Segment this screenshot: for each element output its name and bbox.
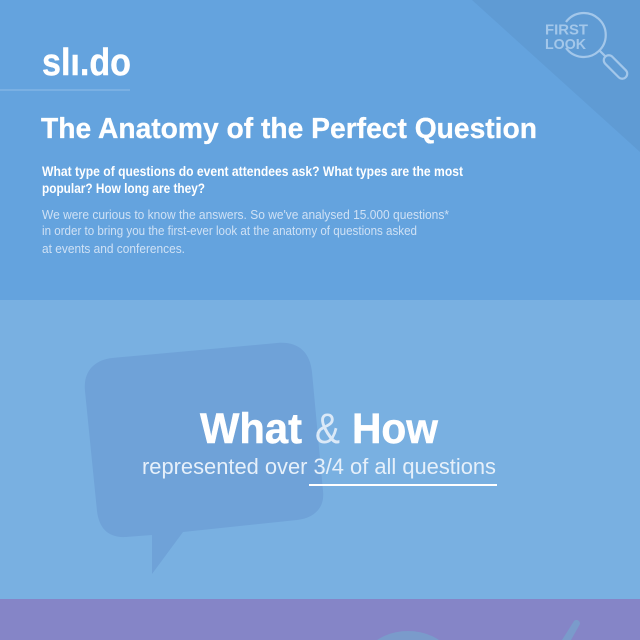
icon: first look magnifier badge: [545, 13, 629, 81]
text block: intro description: We were curious to know the answers. So we've analysed 15.000 questions*: [42, 207, 449, 222]
heading: what and how: [200, 405, 439, 453]
text block: three quarters statement: represented over 3/4 of all questions: [142, 454, 496, 479]
heading: what and how: What: [200, 405, 302, 453]
text block: intro description: at events and conferences.: [42, 241, 185, 256]
panel: purple next section: [0, 599, 640, 640]
heading: what and how: &: [315, 405, 340, 453]
underline: [309, 484, 497, 486]
text block: intro questions: [42, 164, 463, 196]
panel: what and how background: [0, 300, 640, 599]
icon: first look magnifier badge: FIRST: [545, 22, 588, 38]
logo: sli.do: slı.do: [42, 42, 131, 84]
heading: what and how: How: [352, 405, 439, 453]
text block: intro description: in order to bring you the first-ever look at the anatomy of questions asked: [42, 223, 417, 238]
text block: intro description: [42, 207, 449, 256]
text block: intro questions: What type of questions do event attendees ask? What types are the most: [42, 164, 463, 179]
icon: first look magnifier badge: LOOK: [545, 36, 586, 53]
panel: intro header background: [0, 0, 640, 300]
icon: speech bubble: [85, 343, 323, 574]
text block: intro questions: popular? How long are they?: [42, 181, 205, 196]
divider under logo: [0, 90, 130, 91]
title: The Anatomy of the Perfect Question: [41, 113, 537, 145]
